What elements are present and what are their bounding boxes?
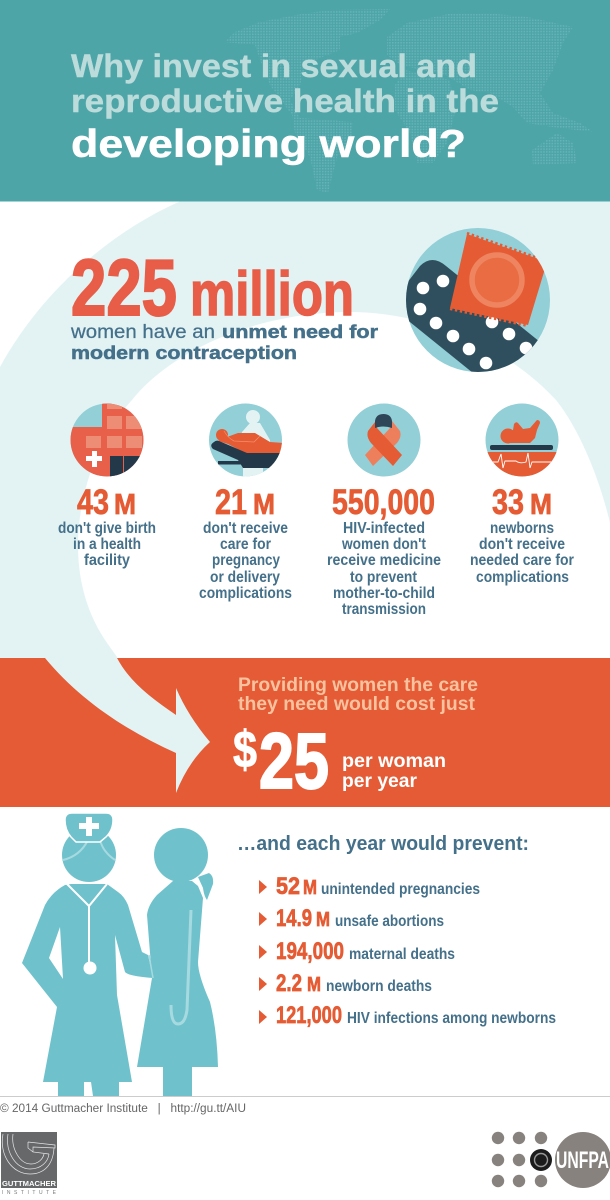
stat: 550,000: to prevent bbox=[350, 569, 417, 586]
cost text: Providing women the care bbox=[238, 675, 478, 696]
footer credit: © 2014 Guttmacher Institute | http://gu.tt/AIU bbox=[0, 1103, 246, 1115]
stat: 43 M: 43 bbox=[77, 483, 109, 522]
stat: 550,000: transmission bbox=[342, 601, 426, 618]
logo: Guttmacher Institute: INSTITUTE bbox=[2, 1190, 57, 1196]
cost text: per woman bbox=[342, 751, 446, 772]
stat: 33 M bbox=[470, 403, 574, 586]
stat: 21 M: or delivery bbox=[210, 569, 280, 586]
stat: 43 M: M bbox=[114, 489, 136, 521]
list: outcomes prevented bbox=[259, 873, 556, 1029]
stat: 21 M: pregnancy bbox=[212, 552, 280, 569]
item: maternal deaths bbox=[259, 938, 455, 965]
stat: 550,000: 550,000 bbox=[332, 483, 435, 522]
item: unsafe abortions bbox=[259, 905, 444, 932]
stat: 21 M: complications bbox=[199, 585, 292, 602]
stat: 33 M: M bbox=[530, 489, 552, 521]
stat: 33 M: 33 bbox=[492, 483, 524, 522]
stat: 43 M bbox=[58, 403, 156, 569]
stat: 21 M bbox=[199, 403, 292, 602]
item: newborn deaths: 2.2 bbox=[276, 970, 302, 997]
title: developing world? bbox=[71, 123, 466, 166]
world map dots bbox=[225, 9, 593, 193]
stat: 21 M: M bbox=[253, 489, 275, 521]
header panel bbox=[0, 0, 610, 202]
headline: 225 million: modern contraception bbox=[71, 342, 297, 363]
item: unintended pregnancies: M bbox=[303, 877, 317, 899]
stat: 550,000 bbox=[327, 404, 441, 618]
illustration: nurse and patient bbox=[22, 813, 218, 1096]
cost text: they need would cost just bbox=[238, 694, 476, 715]
icon: newborn with heartbeat bbox=[485, 403, 559, 477]
icon: hospital bbox=[70, 403, 144, 477]
subheading: prevent: …and each year would prevent: bbox=[237, 833, 529, 855]
stat: 33 M: don't receive bbox=[479, 536, 565, 553]
title bbox=[71, 48, 499, 166]
item: unsafe abortions: M bbox=[316, 909, 330, 931]
item: HIV infections: HIV infections among newborns bbox=[347, 1010, 556, 1027]
stat: 550,000: receive medicine bbox=[327, 552, 441, 569]
headline: 225 million: unmet need for bbox=[222, 321, 378, 342]
cost text: per year bbox=[342, 771, 418, 792]
headline: 225 million: 225 bbox=[71, 243, 177, 332]
stat: 43 M: facility bbox=[84, 552, 130, 569]
stat: 21 M: 21 bbox=[215, 483, 247, 522]
icon: awareness ribbon bbox=[348, 404, 420, 476]
item: maternal deaths: maternal deaths bbox=[349, 946, 455, 963]
nurse bbox=[22, 828, 153, 1096]
stat: 550,000: women don't bbox=[341, 536, 426, 553]
item: newborn deaths bbox=[259, 970, 432, 997]
logo: UNFPA bbox=[492, 1132, 610, 1188]
stat: 43 M: don't give birth bbox=[58, 520, 156, 537]
item: unsafe abortions: unsafe abortions bbox=[335, 913, 444, 930]
item: unsafe abortions: 14.9 bbox=[276, 905, 312, 932]
headline: 225 million: women have an bbox=[70, 322, 215, 343]
cost text: $ bbox=[233, 721, 257, 779]
headline: 225 million bbox=[70, 243, 378, 363]
logo: Guttmacher Institute bbox=[1, 1132, 57, 1196]
item: maternal deaths: 194,000 bbox=[276, 938, 344, 965]
item: newborn deaths: newborn deaths bbox=[326, 978, 432, 995]
panel: cost band bbox=[0, 658, 610, 807]
stat: 550,000: HIV-infected bbox=[343, 520, 425, 537]
cost text bbox=[233, 675, 478, 805]
logo: Guttmacher Institute: GUTTMACHER bbox=[2, 1179, 57, 1188]
stat: 21 M: care for bbox=[220, 536, 271, 553]
cost text: 25 bbox=[259, 716, 329, 805]
background swirl arrow bbox=[0, 200, 610, 793]
item: unintended pregnancies bbox=[259, 873, 480, 900]
stat: 33 M: needed care for bbox=[470, 552, 574, 569]
patient bbox=[137, 828, 218, 1096]
title: reproductive health in the bbox=[71, 83, 499, 119]
item: unintended pregnancies: unintended pregnancies bbox=[321, 881, 480, 898]
stat: 21 M: don't receive bbox=[203, 520, 288, 537]
item: newborn deaths: M bbox=[307, 974, 321, 996]
stat: 43 M: in a health bbox=[73, 536, 141, 553]
stat: 550,000: mother-to-child bbox=[333, 585, 435, 602]
item: HIV infections: 121,000 bbox=[276, 1002, 342, 1029]
item: unintended pregnancies: 52 bbox=[276, 873, 300, 900]
icon: contraceptive pills and condom bbox=[406, 228, 550, 372]
arrow head bbox=[45, 658, 210, 793]
stat: 33 M: newborns bbox=[490, 520, 554, 537]
stat: 33 M: complications bbox=[476, 569, 569, 586]
title: Why invest in sexual and bbox=[71, 48, 477, 84]
headline: 225 million: million bbox=[190, 260, 354, 329]
item: HIV infections bbox=[259, 1002, 556, 1029]
icon: patient on delivery bed bbox=[208, 403, 284, 478]
